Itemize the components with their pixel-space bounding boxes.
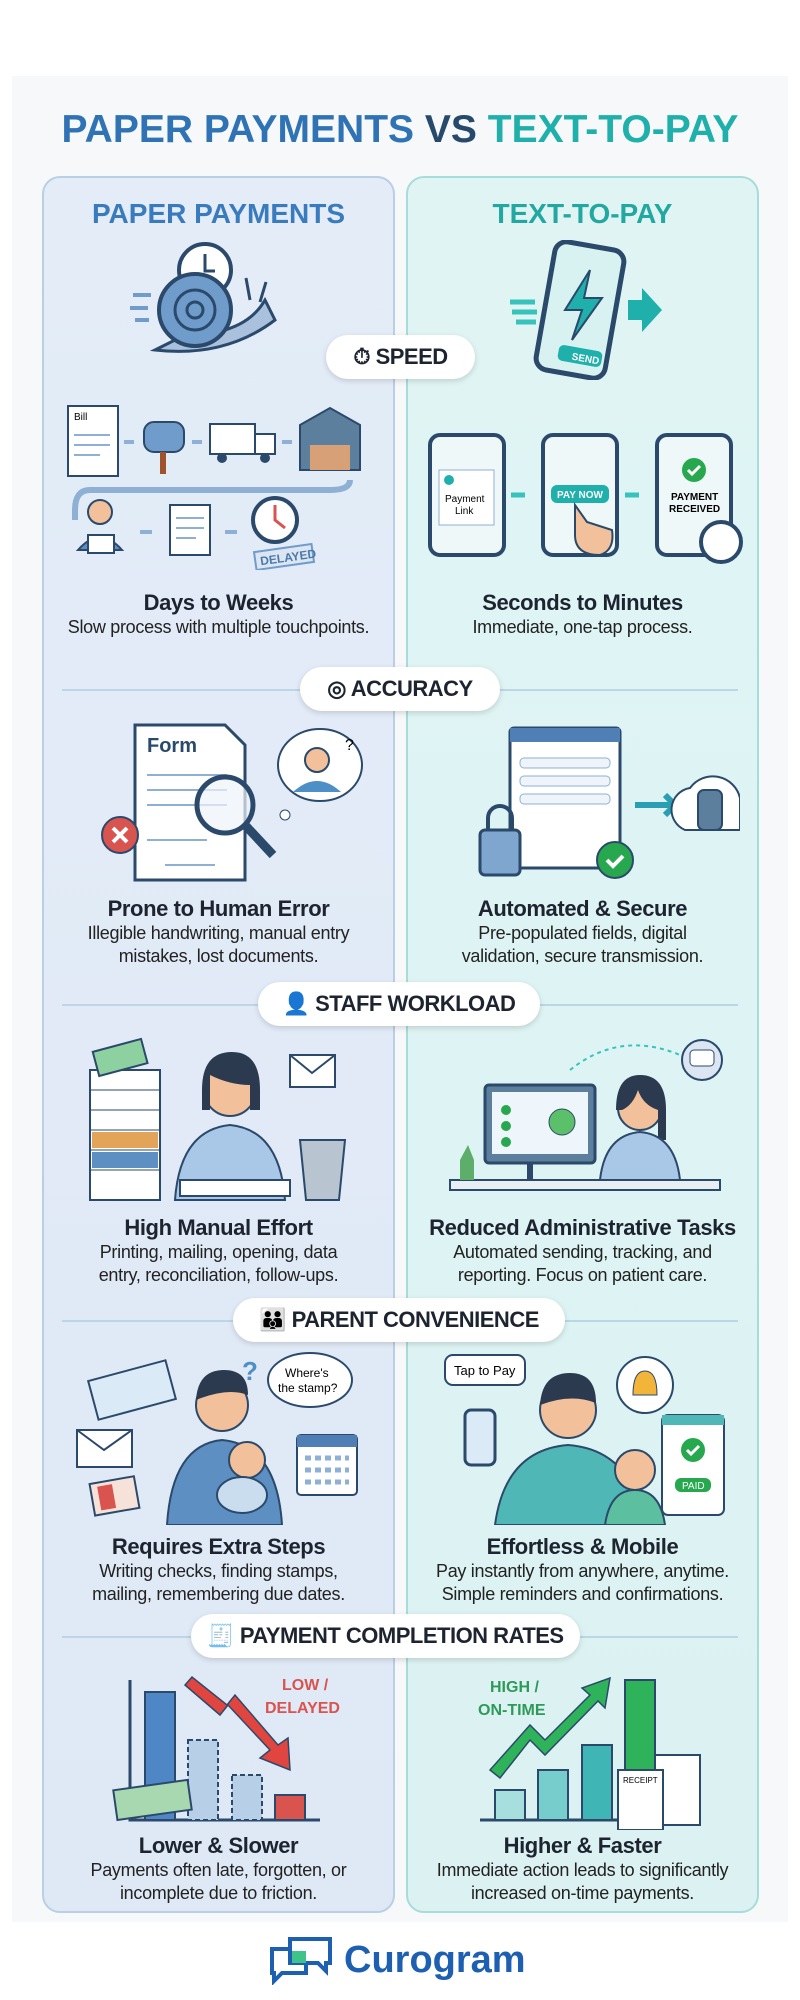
heading: paper payments: PAPER PAYMENTS [92, 198, 345, 229]
text: higher & faster [437, 1833, 728, 1903]
text: lower & slower: Lower & Slower [139, 1833, 298, 1858]
pill: staff workload: 👤 STAFF WORKLOAD [283, 991, 515, 1016]
text: effortless & mobile [436, 1534, 729, 1604]
text: automated & secure: Automated & Secure [478, 896, 687, 921]
text: automated & secure [462, 896, 703, 966]
icon: phone with lightning: SEND [571, 352, 600, 367]
illustration: form with magnifier: Form [147, 735, 197, 757]
text: prone to human error: Prone to Human Error [108, 896, 329, 921]
text: prone to human error [88, 896, 350, 966]
illustration: text-to-pay three phones: Link [455, 506, 474, 517]
illustration: text-to-pay three phones: RECEIVED [669, 504, 720, 515]
chart: declining bars: LOW / [282, 1677, 329, 1694]
pill: speed: ⏱ SPEED [353, 344, 448, 369]
text: requires extra steps [92, 1534, 345, 1604]
pill: staff workload [258, 982, 540, 1026]
illustration: stressed parent: Where's [285, 1366, 329, 1380]
illustration: happy parent with phone [444, 1354, 725, 1525]
text: days to weeks [68, 590, 369, 637]
pill: parent convenience: 👪 PARENT CONVENIENCE [259, 1307, 539, 1332]
icon: phone with lightning [510, 240, 662, 380]
text: requires extra steps: Requires Extra Steps [112, 1534, 325, 1559]
text: high manual effort: Printing, mailing, opening, data [100, 1242, 337, 1262]
illustration: stressed staff [89, 1038, 346, 1201]
text: effortless & mobile: Pay instantly from anywhere, anytime. [436, 1561, 729, 1581]
text: reduced administrative tasks: reporting. Focus on patient care. [458, 1265, 707, 1285]
pill: speed [326, 335, 475, 379]
text: lower & slower: Payments often late, forgotten, or [91, 1860, 346, 1880]
text: seconds to minutes: Seconds to Minutes [482, 590, 683, 615]
illustration: stressed parent: the stamp? [278, 1381, 338, 1395]
illustration: form with magnifier [101, 724, 363, 882]
text: requires extra steps: mailing, remembering due dates. [92, 1584, 345, 1604]
title: PAPER PAYMENTS VS TEXT-TO-PAY [62, 108, 738, 151]
illustration: happy parent with phone: PAID [682, 1481, 705, 1492]
text: high manual effort: High Manual Effort [124, 1215, 313, 1240]
text: higher & faster: Higher & Faster [504, 1833, 661, 1858]
chart: rising bars: HIGH / [490, 1679, 539, 1696]
text: automated & secure: Pre-populated fields, digital [478, 923, 687, 943]
chart: rising bars [478, 1676, 701, 1830]
text: reduced administrative tasks: Reduced Administrative Tasks [429, 1215, 736, 1240]
text: days to weeks: Days to Weeks [144, 590, 293, 615]
text: higher & faster: increased on-time payments. [471, 1883, 694, 1903]
pill: accuracy [300, 667, 500, 711]
logo: curogram [270, 1937, 526, 1985]
pill: accuracy: ◎ ACCURACY [327, 676, 473, 701]
illustration: secure form to cloud [478, 726, 740, 879]
illustration: text-to-pay three phones: PAYMENT [671, 492, 718, 503]
illustration: paper process flow [67, 405, 361, 570]
panel: text-to-pay [406, 176, 759, 1913]
text: seconds to minutes [472, 590, 692, 637]
text: reduced administrative tasks [429, 1215, 736, 1285]
chart: declining bars: DELAYED [265, 1700, 340, 1717]
illustration: text-to-pay three phones: Payment [445, 494, 485, 505]
text: prone to human error: mistakes, lost documents. [119, 946, 318, 966]
pill: payment completion rates [191, 1614, 580, 1658]
illustration: relaxed staff at computer [449, 1039, 723, 1191]
pill: payment completion rates: 🧾 PAYMENT COMPLETION RATES [207, 1623, 564, 1648]
illustration: text-to-pay three phones: PAY NOW [557, 490, 603, 501]
text: lower & slower: incomplete due to friction. [120, 1883, 317, 1903]
text: days to weeks: Slow process with multiple touchpoints. [68, 617, 369, 637]
illustration: stressed parent [76, 1352, 358, 1525]
text: high manual effort [99, 1215, 338, 1285]
logo: curogram: Curogram [344, 1938, 526, 1980]
text: lower & slower [91, 1833, 346, 1903]
panel: paper payments [42, 176, 395, 1913]
illustration: happy parent with phone: Tap to Pay [454, 1363, 516, 1378]
illustration: paper process flow: DELAYED [259, 547, 317, 568]
text: seconds to minutes: Immediate, one-tap process. [472, 617, 692, 637]
pill: parent convenience [233, 1298, 565, 1342]
text: prone to human error: Illegible handwriting, manual entry [88, 923, 349, 943]
text: higher & faster: Immediate action leads to significantly [437, 1860, 728, 1880]
text: requires extra steps: Writing checks, finding stamps, [99, 1561, 338, 1581]
illustration: paper process flow: Bill [74, 412, 87, 423]
text: effortless & mobile: Effortless & Mobile [487, 1534, 678, 1559]
chart: rising bars: RECEIPT [623, 1776, 658, 1785]
text: high manual effort: entry, reconciliation, follow-ups. [99, 1265, 338, 1285]
text: reduced administrative tasks: Automated sending, tracking, and [453, 1242, 712, 1262]
illustration: stressed parent: ? [242, 1356, 258, 1386]
text: effortless & mobile: Simple reminders and confirmations. [442, 1584, 723, 1604]
icon: snail with clock [130, 242, 277, 353]
illustration: text-to-pay three phones [428, 433, 743, 564]
heading: text-to-pay: TEXT-TO-PAY [493, 198, 672, 229]
text: automated & secure: validation, secure transmission. [462, 946, 703, 966]
illustration: form with magnifier: ? [345, 737, 354, 754]
chart: declining bars [112, 1676, 340, 1822]
chart: rising bars: ON-TIME [478, 1702, 546, 1719]
